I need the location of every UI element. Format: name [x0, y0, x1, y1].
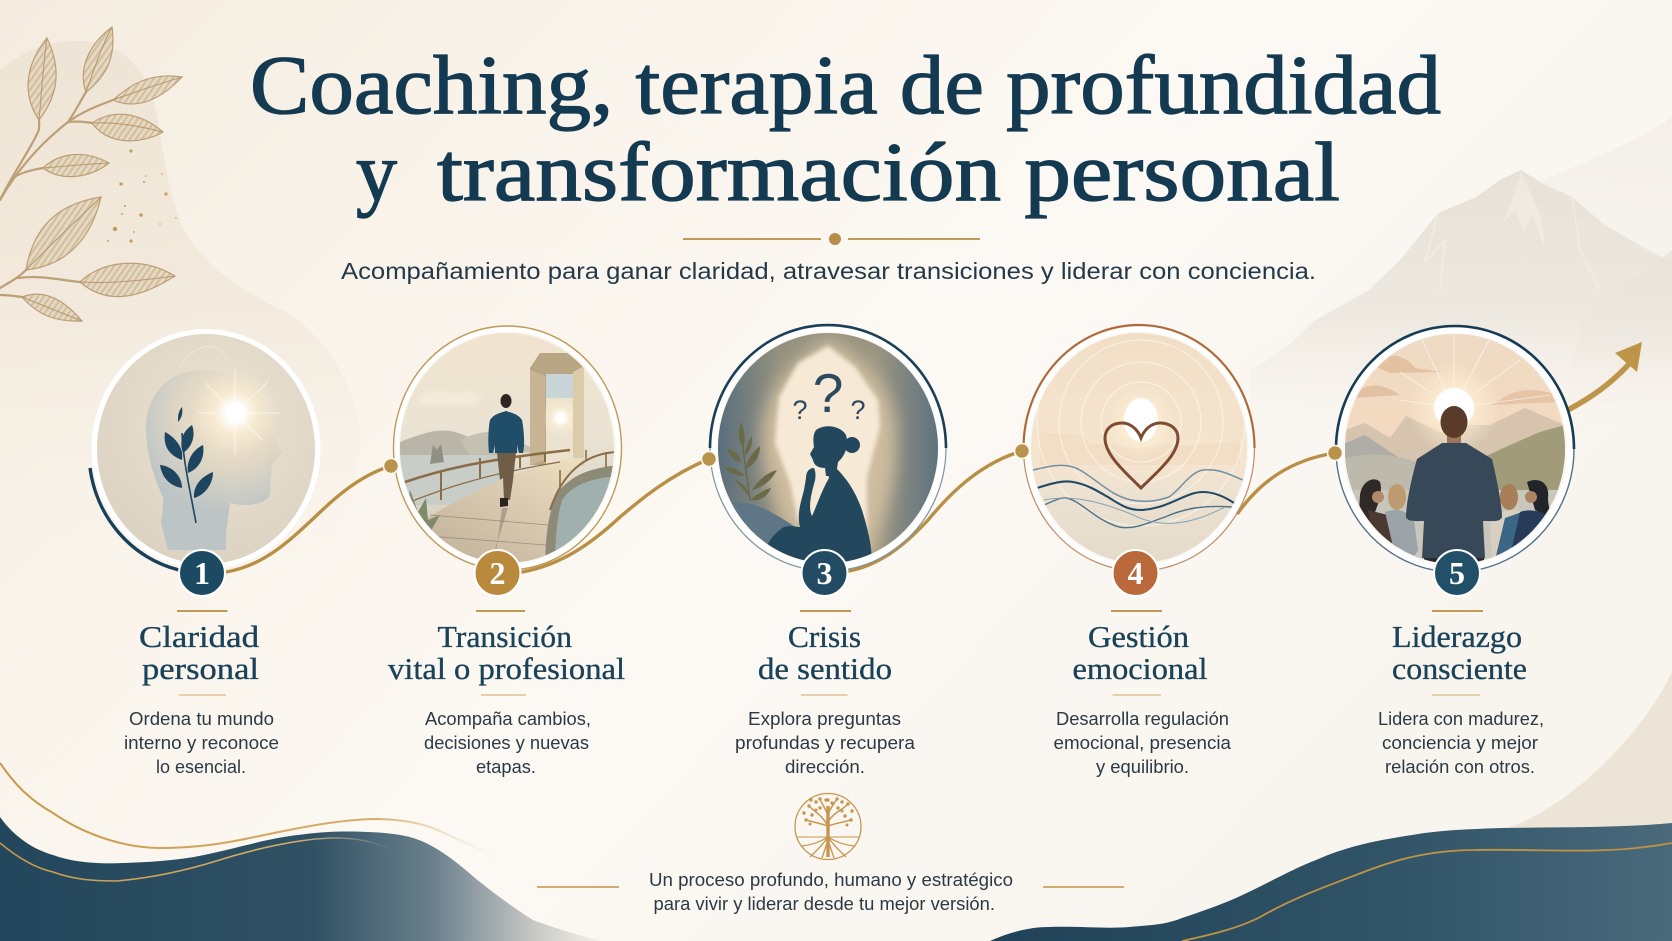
leader back: [1447, 436, 1461, 443]
plant: [724, 423, 777, 500]
step 1 text: Ordena tu mundo: [129, 709, 274, 729]
step 3 text: dirección.: [785, 757, 865, 777]
growth arrow: [1568, 342, 1642, 410]
closing message: para vivir y liderar desde tu mejor versión.: [654, 894, 995, 914]
step 2 text: [388, 611, 625, 777]
team right: [1500, 484, 1518, 510]
subtitle: Acompañamiento para ganar claridad, atravesar transiciones y liderar con conciencia.: [341, 258, 1316, 284]
title divider: [683, 233, 980, 245]
team left: [1358, 479, 1398, 550]
leaf H: [22, 294, 82, 321]
leaf B: [83, 27, 113, 92]
title: y: [356, 126, 397, 219]
step 4 text: y equilibrio.: [1096, 757, 1189, 777]
title: [250, 39, 1441, 219]
step 1 illustration: head with leaves: [90, 330, 325, 570]
leaf C: [113, 76, 182, 104]
number badge 3: [802, 550, 848, 596]
step 4 text: Gestión: [1088, 619, 1190, 654]
step 3 text: [735, 611, 916, 777]
number badge 5: 5: [1449, 555, 1465, 591]
step 2 text: vital o profesional: [388, 651, 625, 686]
step 5 illustration: leader facing sunrise with team: [1336, 326, 1574, 572]
journey line connecting steps: [226, 451, 1335, 572]
number badge 5: [1434, 550, 1480, 596]
door: [530, 353, 584, 465]
step 3 text: Crisis: [788, 619, 861, 654]
number badge 2: 2: [490, 555, 506, 591]
leaf E: [43, 154, 109, 177]
title: transformación personal: [437, 126, 1340, 219]
leaf A: [28, 38, 56, 120]
closing message: Un proceso profundo, humano y estratégico: [649, 870, 1013, 890]
icon: tree of life: [795, 794, 861, 860]
step 3 illustration: woman in cave with questions: [710, 325, 946, 571]
question marks: ?: [813, 362, 843, 424]
decorative leaf branch: [0, 27, 182, 321]
leaf G: [80, 263, 175, 297]
leaf F: [26, 197, 101, 270]
step 3 illustration: woman in cave with questions: ?: [792, 395, 808, 425]
number badge 3: 3: [816, 555, 832, 591]
head silhouette: [146, 370, 282, 550]
number badge 4: [1112, 550, 1158, 596]
man: [495, 508, 508, 550]
mountains on the right: [1240, 117, 1672, 450]
step 2 text: Acompaña cambios,: [425, 709, 591, 729]
left gold wave lines: [0, 763, 501, 881]
step 4 text: [1054, 611, 1232, 777]
bridge deck: [424, 458, 584, 562]
right bottom navy wave: [990, 823, 1672, 941]
beige shape lower right: [1500, 672, 1672, 835]
title: Coaching, terapia de profundidad: [250, 39, 1441, 132]
closing message: [537, 870, 1124, 914]
step 1 text: Claridad: [139, 619, 260, 654]
step 2 text: decisiones y nuevas: [424, 733, 589, 753]
step 5 text: conciencia y mejor: [1382, 733, 1538, 753]
woman silhouette: [768, 426, 872, 562]
step 5 text: relación con otros.: [1385, 757, 1535, 777]
step 3 text: de sentido: [758, 651, 892, 686]
right gold wave line: [1182, 843, 1672, 941]
number badge 2: [474, 550, 520, 596]
step 4 text: emocional: [1072, 651, 1208, 686]
step 1 text: personal: [142, 651, 259, 686]
step 5 text: Lidera con madurez,: [1378, 709, 1544, 729]
node dots on the journey line: [384, 444, 1342, 474]
step 4 illustration: heart with waves: [1024, 318, 1255, 571]
step 3 illustration: woman in cave with questions: ?: [850, 395, 866, 425]
step 4 text: emocional, presencia: [1054, 733, 1232, 753]
number badge 1: [179, 550, 225, 596]
left bottom navy wave: [0, 817, 602, 941]
gold speckles: [107, 149, 177, 243]
step 3 text: profundas y recupera: [735, 733, 916, 753]
step 1 text: interno y reconoce: [124, 733, 279, 753]
step 5 text: Liderazgo: [1392, 619, 1522, 654]
leaf D: [92, 114, 163, 141]
step 5 text: [1378, 611, 1544, 777]
step 1 text: lo esencial.: [156, 757, 246, 777]
beige watercolor blob top left: [0, 41, 360, 560]
number badge 1: 1: [194, 555, 210, 591]
step 4 text: Desarrolla regulación: [1056, 709, 1229, 729]
waves: [1033, 465, 1243, 528]
number badge 4: 4: [1128, 555, 1144, 591]
step 2 text: Transición: [438, 619, 573, 654]
step 5 text: consciente: [1392, 651, 1527, 686]
step 2 text: etapas.: [476, 757, 536, 777]
bridge arch right: [545, 466, 613, 556]
step 3 text: Explora preguntas: [748, 709, 901, 729]
railings: [402, 450, 616, 510]
leaf sprig: [160, 407, 213, 523]
step 1 text: [124, 611, 279, 777]
step 2 illustration: man crossing bridge to door: [394, 326, 622, 570]
